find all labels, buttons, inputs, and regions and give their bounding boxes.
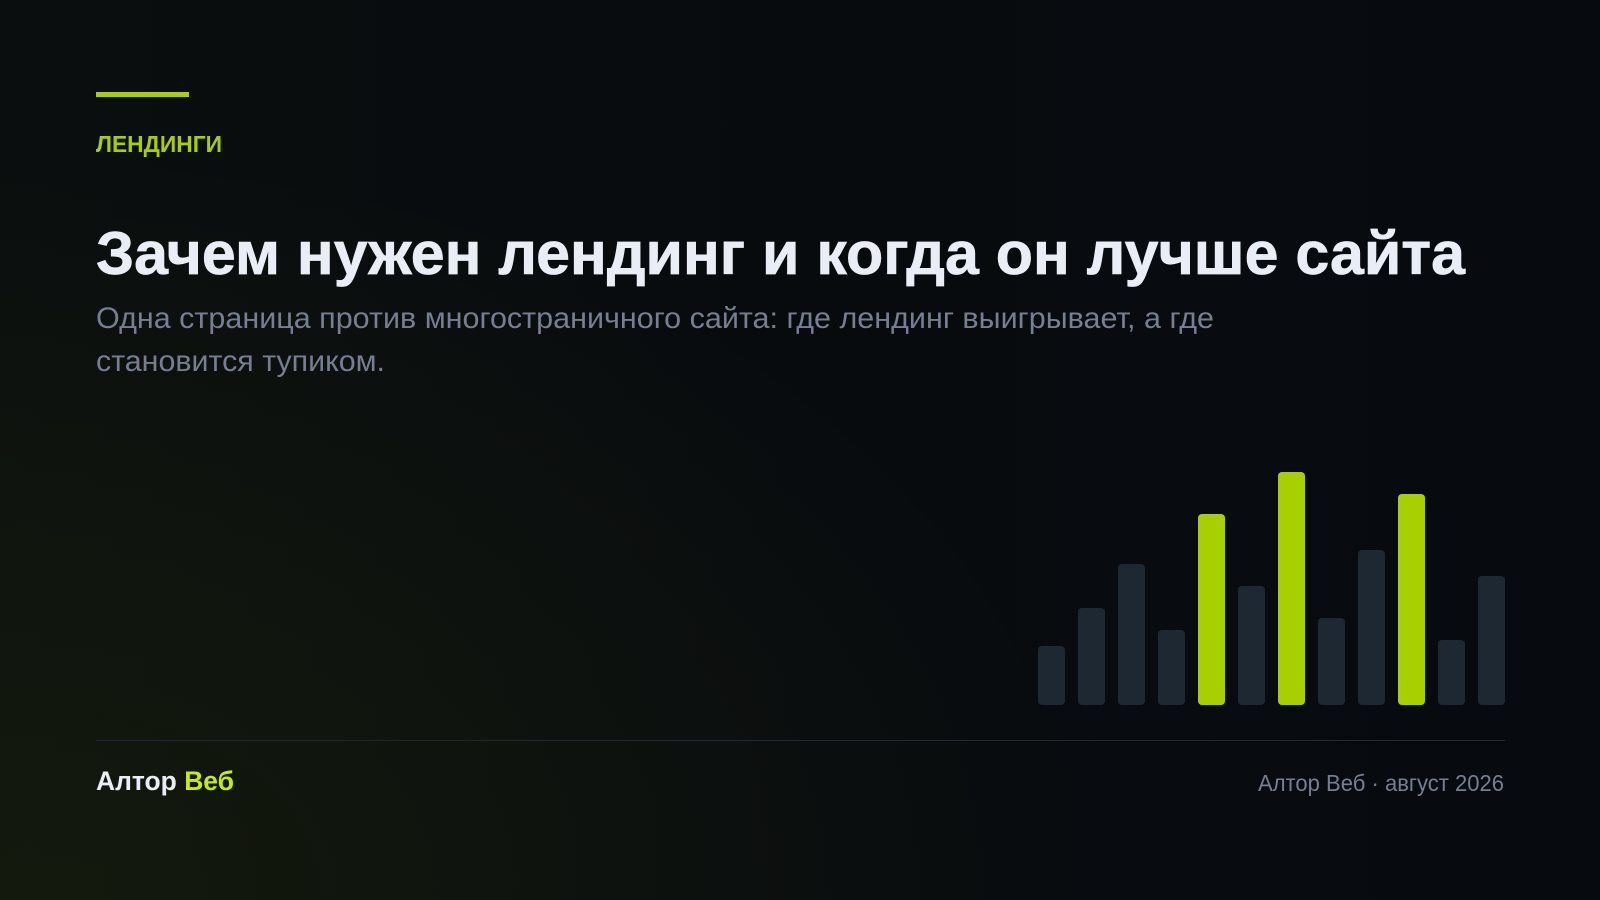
subtitle xyxy=(96,302,1214,378)
bar 2 xyxy=(1078,608,1105,705)
bar 8 xyxy=(1318,618,1345,705)
bar 9 xyxy=(1358,550,1385,705)
bar chart xyxy=(1038,472,1505,705)
title: Зачем нужен лендинг и когда он лучше сайта xyxy=(96,220,1466,287)
bar 12 xyxy=(1478,576,1505,705)
accent rule xyxy=(96,92,189,97)
subtitle line 2: становится тупиком. xyxy=(96,345,385,378)
eyebrow label: ЛЕНДИНГИ xyxy=(96,131,222,157)
bar 1 xyxy=(1038,646,1065,705)
subtitle line 1: Одна страница против многостраничного сайта: где лендинг выигрывает, а где xyxy=(96,302,1214,335)
bar 6 xyxy=(1238,586,1265,705)
bar 5 highlighted xyxy=(1198,514,1225,705)
bar 3 xyxy=(1118,564,1145,705)
bar 11 xyxy=(1438,640,1465,705)
bar 4 xyxy=(1158,630,1185,705)
footer date: Алтор Веб · август 2026 xyxy=(1258,770,1504,796)
bar 7 highlighted xyxy=(1278,472,1305,705)
bar 10 highlighted xyxy=(1398,494,1425,705)
brand logo: Алтор Веб xyxy=(96,766,234,796)
